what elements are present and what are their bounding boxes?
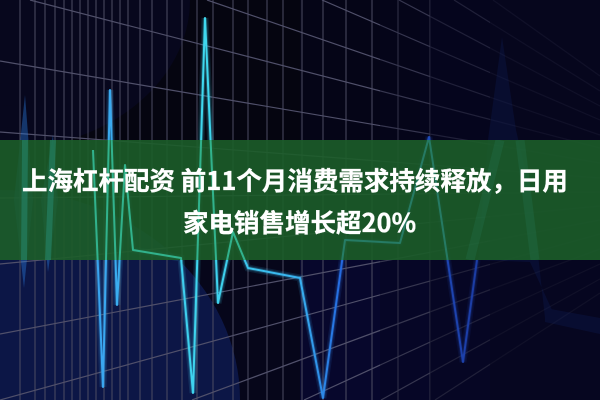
perspective grid: vertical lines [20, 0, 430, 400]
ECG glow wide [93, 18, 477, 398]
grid fade on right [380, 0, 600, 400]
ECG trace seen through banner [21, 140, 540, 260]
faded right spike [478, 37, 600, 334]
green banner [0, 140, 600, 260]
ECG glow narrow [93, 18, 477, 398]
top-left navy glow [0, 0, 190, 150]
title line 1: 上海杠杆配资 前11个月消费需求持续释放，日用 [22, 161, 568, 198]
faint left spikes [14, 95, 58, 288]
ECG trace line [93, 18, 477, 398]
lower-left blue glow [0, 190, 240, 400]
title line 2: 家电销售增长超20% [183, 203, 416, 240]
